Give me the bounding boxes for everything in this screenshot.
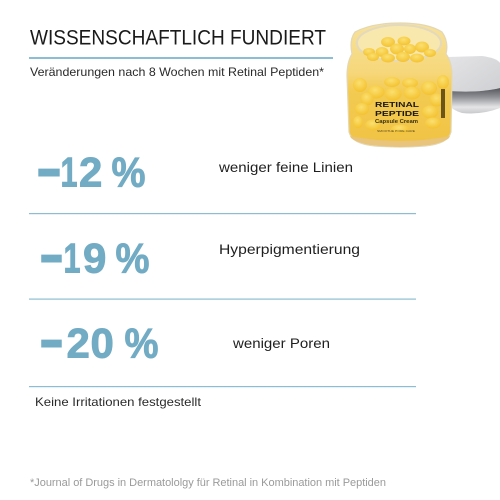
stat row: fine lines: 2 bbox=[79, 148, 102, 196]
jar label text: PEPTIDE bbox=[375, 109, 419, 118]
stat row: hyperpigmentation: 1 bbox=[64, 234, 80, 282]
jar lid bbox=[448, 56, 500, 113]
stat row: pores: 0 bbox=[90, 320, 114, 366]
stat row: pores: % bbox=[124, 320, 158, 366]
title: WISSENSCHAFTLICH FUNDIERT bbox=[30, 26, 326, 50]
stat row: fine lines: % bbox=[112, 148, 146, 196]
stat row: fine lines bbox=[37, 122, 353, 211]
stat row: hyperpigmentation: % bbox=[116, 234, 150, 282]
jar label text: RETINAL bbox=[375, 100, 420, 109]
stat row: pores bbox=[40, 293, 330, 382]
stat row: pores: 2 bbox=[66, 320, 90, 366]
stat row: hyperpigmentation: – bbox=[40, 208, 63, 297]
product image: retinal peptide jar with lid bbox=[347, 23, 500, 147]
stat row: pores: – bbox=[40, 293, 63, 382]
stat row: fine lines: 1 bbox=[60, 148, 78, 196]
jar label text: SMOOTHE PORE CARE bbox=[377, 129, 415, 133]
note: no irritations: Keine Irritationen festgestellt bbox=[35, 395, 202, 409]
stat row: hyperpigmentation: Hyperpigmentierung bbox=[219, 241, 360, 257]
stat row: fine lines: weniger feine Linien bbox=[218, 159, 353, 175]
jar label text: Capsule Cream bbox=[375, 119, 419, 125]
stat row: hyperpigmentation bbox=[40, 208, 360, 297]
jar label text bbox=[375, 100, 420, 133]
capsules bbox=[353, 36, 449, 134]
stat row: fine lines: – bbox=[37, 122, 61, 211]
stat row: hyperpigmentation: 9 bbox=[83, 234, 106, 282]
stat row: pores: weniger Poren bbox=[232, 335, 330, 351]
footnote: *Journal of Drugs in Dermatololgy für Retinal in Kombination mit Peptiden bbox=[30, 477, 386, 489]
jar body bbox=[347, 23, 452, 147]
subtitle: Veränderungen nach 8 Wochen mit Retinal Peptiden* bbox=[30, 65, 324, 79]
